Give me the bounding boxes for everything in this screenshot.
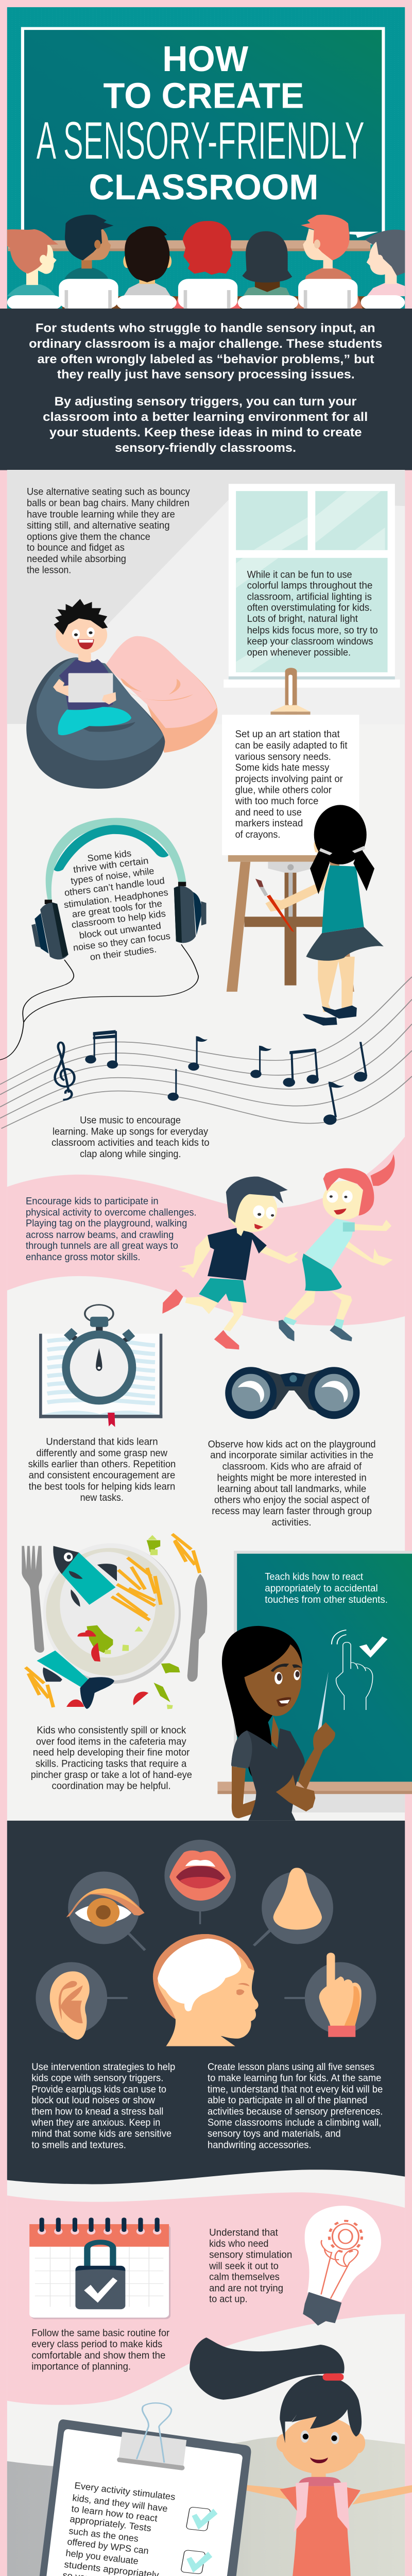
text: gross motor: across narrow beams, and crawling — [26, 1229, 174, 1240]
text: gross motor: Encourage kids to participate in — [26, 1195, 159, 1207]
text: art station — [235, 728, 347, 840]
text: tests from WPS, rotated: appropriately. Tests — [70, 2514, 152, 2533]
icon: pointing hand and check — [332, 1630, 388, 1710]
text: natural light: classroom, artificial lighting is — [247, 591, 372, 602]
text: tests from WPS, rotated: help you evaluate — [65, 2548, 139, 2566]
text: alternative seating: have trouble learning while they are — [27, 509, 175, 520]
text: tests from WPS, rotated: to learn how to react — [71, 2503, 158, 2523]
paper background — [7, 470, 405, 2576]
text: seeking stimulation — [209, 2227, 292, 2304]
text: repetition — [28, 1436, 176, 1503]
salad and tomatoes — [66, 1535, 180, 1709]
text: playground observation: activities. — [272, 1516, 312, 1528]
student 4 — [174, 221, 241, 309]
teacher — [222, 1626, 335, 1821]
head — [277, 2374, 365, 2487]
text: seeking stimulation: will seek it out to — [209, 2260, 279, 2272]
chalk tray — [8, 232, 379, 251]
text: fine motor: skills. Practicing tasks that require a — [36, 1758, 187, 1769]
dress — [280, 2486, 360, 2576]
illustration: boy on bean bags — [26, 599, 217, 789]
icon: mouth — [169, 1851, 231, 1901]
text: accidental touches — [265, 1571, 388, 1605]
text: headphones, rotated: others can’t handle loud — [64, 875, 165, 898]
text: alternative seating: Use alternative seating such as bouncy — [27, 486, 190, 497]
intro text: your students. Keep these ideas in mind to create — [49, 425, 362, 439]
right ear cup — [174, 886, 207, 943]
text: playground observation — [208, 1438, 376, 1528]
text: playground observation: classroom. Kids who are afraid of — [222, 1461, 362, 1472]
text: gross motor — [26, 1195, 197, 1262]
intro text: they really just have sensory processing issues. — [57, 367, 355, 381]
text: same basic routine: Follow the same basic routine for — [31, 2327, 169, 2338]
pink wave band: physical activity — [7, 1137, 405, 1349]
text: music: classroom activities and teach kids to — [52, 1137, 210, 1148]
text: music — [52, 1114, 210, 1159]
text: headphones, rotated: classroom to help kids — [71, 908, 166, 930]
student 2 — [59, 215, 118, 309]
illustration: headphones — [0, 818, 207, 1060]
text: natural light — [247, 569, 378, 658]
window with lighting tip — [224, 484, 400, 688]
intro text: sensory-friendly classrooms. — [115, 440, 296, 454]
text: headphones, rotated: stimulation. Headphones — [63, 887, 169, 910]
text: art station: and need to use — [235, 807, 302, 818]
beamed pair — [283, 1048, 319, 1087]
text: intervention strategies: mind that some kids are sensitive — [31, 2128, 171, 2139]
text: art station: of crayons. — [235, 829, 280, 840]
text: headphones, rotated: block out unwanted — [79, 920, 162, 941]
painting girl — [255, 805, 384, 1026]
text: seeking stimulation: Understand that — [209, 2227, 278, 2238]
text: seeking stimulation: to act up. — [209, 2293, 248, 2304]
icon: eye — [66, 1888, 145, 1927]
text: seeking stimulation: sensory stimulation — [209, 2249, 292, 2260]
running girl — [279, 1154, 395, 1341]
text: five senses lesson plans — [208, 2061, 383, 2150]
illustration: balancing girl — [190, 2337, 412, 2576]
icon: light bulb with gear — [303, 2206, 381, 2326]
text: intervention strategies: Use intervention strategies to help — [31, 2061, 175, 2072]
text: intervention strategies: block out loud noises or show — [31, 2094, 155, 2106]
left ear cup — [31, 902, 68, 959]
icon: baby head and brain — [153, 1934, 259, 2046]
student 1 — [7, 229, 62, 310]
text: intervention strategies: to smells and textures. — [31, 2139, 126, 2150]
text: headphones, rotated: types of noise, while — [70, 866, 154, 886]
text: art station: can be easily adapted to fit — [235, 740, 347, 751]
arms — [212, 2482, 288, 2500]
text: fine motor: pincher grasp or take a lot of hand-eye — [31, 1769, 192, 1780]
text: natural light: While it can be fun to use — [247, 569, 352, 580]
text: seeking stimulation: kids who need — [209, 2238, 268, 2249]
text: fine motor: over food items in the cafeteria may — [36, 1736, 186, 1747]
text: same basic routine: every class period to make kids — [31, 2338, 162, 2350]
text: repetition: differently and some grasp new — [36, 1447, 167, 1459]
ponytail — [190, 2337, 345, 2400]
text: intervention strategies: kids cope with sensory triggers. — [31, 2072, 163, 2083]
title: CLASSROOM — [89, 167, 318, 207]
fork — [22, 1546, 44, 1653]
text: art station: glue, while others color — [235, 784, 332, 795]
icon: nose — [273, 1868, 322, 1930]
icon: ear — [50, 1971, 90, 2040]
text: gross motor: physical activity to overcome challenges. — [26, 1207, 197, 1218]
text: art station: with too much force — [235, 795, 318, 807]
icon: finger touch — [319, 1953, 362, 2037]
text: same basic routine: importance of planning. — [31, 2361, 131, 2372]
plate — [45, 1544, 181, 1684]
text: alternative seating: options give them the chance — [27, 531, 150, 542]
text: alternative seating: balls or bean bag chairs. Many children — [27, 497, 190, 509]
panel: five senses dark section — [7, 1821, 405, 2184]
text: repetition: skills earlier than others. Repetition — [28, 1458, 176, 1469]
cable — [0, 944, 198, 1060]
icon: binoculars — [225, 1367, 359, 1419]
text: intervention strategies: when they are anxious. Keep in — [31, 2117, 160, 2128]
text: fine motor: need help developing their fine motor — [33, 1747, 190, 1758]
text: playground observation: learning about tall landmarks, while — [217, 1483, 366, 1494]
text: same basic routine — [31, 2327, 169, 2372]
text: tests from WPS, rotated: such as the ones — [68, 2526, 139, 2544]
desks — [62, 296, 367, 309]
text: repetition: new tasks. — [80, 1492, 124, 1503]
easel — [227, 668, 354, 992]
text: art station: projects involving paint or — [235, 773, 343, 784]
beamed notes — [85, 1030, 118, 1069]
text: headphones, rotated: thrive with certain — [73, 855, 149, 875]
text: natural light: keep your classroom windows — [247, 636, 373, 647]
text: alternative seating: needed while absorbing — [27, 553, 126, 564]
title: HOW — [162, 39, 249, 79]
text: art station: Set up an art station that — [235, 728, 340, 739]
single notes — [168, 1036, 367, 1125]
icon: stopwatch on open book — [39, 1305, 162, 1427]
clipboard — [29, 2403, 251, 2576]
title: TO CREATE — [104, 76, 304, 116]
text: five senses lesson plans: handwriting accessories. — [208, 2139, 312, 2150]
wall and light beam — [7, 470, 405, 724]
fries — [25, 1534, 200, 1707]
title — [36, 39, 365, 207]
treble clef — [55, 1042, 74, 1100]
padlock — [75, 2242, 125, 2309]
text: accidental touches: Teach kids how to react — [265, 1571, 363, 1582]
text: gross motor: Playing tag on the playground, walking — [26, 1217, 187, 1229]
text: headphones, rotated: on their studies. — [90, 944, 157, 962]
text: seeking stimulation: and are not trying — [209, 2282, 283, 2294]
text: repetition: Understand that kids learn — [46, 1436, 158, 1447]
text: alternative seating: sitting still, and alternative seating — [27, 520, 170, 531]
student 3 — [116, 226, 177, 310]
intro panel — [0, 309, 412, 470]
text: music: learning. Make up songs for everyday — [53, 1126, 208, 1137]
canvas — [222, 715, 359, 855]
illustration: plate with spilled food — [22, 1534, 207, 1709]
text: headphones, rotated — [63, 848, 171, 962]
icon: calendar with padlock — [29, 2217, 170, 2319]
text: headphones, rotated: Some kids — [87, 848, 132, 863]
knife — [187, 1574, 207, 1682]
connectors — [36, 1840, 376, 2034]
text: art station: markers instead — [235, 818, 303, 829]
text: intervention strategies: them how to knead a stress ball — [31, 2106, 163, 2117]
intro text: By adjusting sensory triggers, you can turn your — [55, 394, 357, 408]
text: same basic routine: comfortable and show them the — [31, 2350, 165, 2361]
text: fine motor: coordination may be helpful. — [52, 1780, 171, 1791]
running boy — [162, 1177, 298, 1349]
hero: classroom chalkboard with students — [7, 7, 405, 310]
intro text — [29, 321, 382, 454]
text: art station: various sensory needs. — [235, 751, 331, 762]
text: art station: Some kids hate messy — [235, 762, 329, 773]
pink bean bag — [105, 636, 217, 753]
student 5 — [238, 231, 298, 310]
student 6 — [296, 215, 363, 309]
boy — [53, 599, 131, 735]
text: tests from WPS, rotated: kids, and they will have — [72, 2493, 168, 2514]
text: headphones, rotated: noise so they can focus — [73, 931, 171, 953]
text: playground observation: heights might be more interested in — [217, 1472, 367, 1483]
text: five senses lesson plans: sensory toys and materials, and — [208, 2128, 341, 2139]
text: gross motor: enhance gross motor skills. — [26, 1251, 140, 1262]
text: tests from WPS, rotated: Every activity stimulates — [74, 2480, 176, 2502]
panel: teacher at chalkboard — [217, 1551, 412, 1821]
text: repetition: and consistent encouragement are — [29, 1469, 175, 1481]
music staff with notes — [0, 977, 412, 1128]
text: music: clap along while singing. — [80, 1148, 181, 1159]
floor band behind clipboard — [7, 2436, 405, 2576]
text: tests from WPS, rotated — [61, 2480, 176, 2576]
text: seeking stimulation: calm themselves — [209, 2271, 280, 2282]
text: gross motor: through tunnels are all great ways to — [26, 1240, 178, 1251]
text: natural light: open whenever possible. — [247, 647, 351, 658]
text: natural light: often overstimulating for kids. — [247, 602, 372, 613]
text: natural light: Lots of bright, natural light — [247, 613, 358, 624]
text: repetition: the best tools for helping kids learn — [29, 1481, 175, 1492]
text: alternative seating — [27, 486, 190, 575]
pink band: routines — [7, 2192, 405, 2405]
text: intervention strategies — [31, 2061, 175, 2150]
text: music: Use music to encourage — [80, 1114, 181, 1126]
text: headphones, rotated: are great tools for the — [72, 898, 163, 920]
text: fine motor: Kids who consistently spill or knock — [37, 1724, 186, 1736]
fish — [37, 1546, 117, 1709]
text: intervention strategies: Provide earplugs kids can use to — [31, 2083, 166, 2095]
checkboxes — [175, 2507, 217, 2576]
text: accidental touches: appropriately to accidental — [265, 1583, 378, 1594]
dark bean bag — [26, 657, 165, 789]
illustration: easel and painting girl — [222, 668, 384, 1026]
student 7 — [361, 230, 405, 310]
text: tests from WPS, rotated: offered by WPS can — [67, 2536, 149, 2556]
text: fine motor — [31, 1724, 192, 1791]
text: natural light: colorful lamps throughout the — [247, 580, 372, 591]
text: alternative seating: the lesson. — [27, 564, 71, 575]
text: alternative seating: to bounce and fidget as — [27, 542, 125, 553]
